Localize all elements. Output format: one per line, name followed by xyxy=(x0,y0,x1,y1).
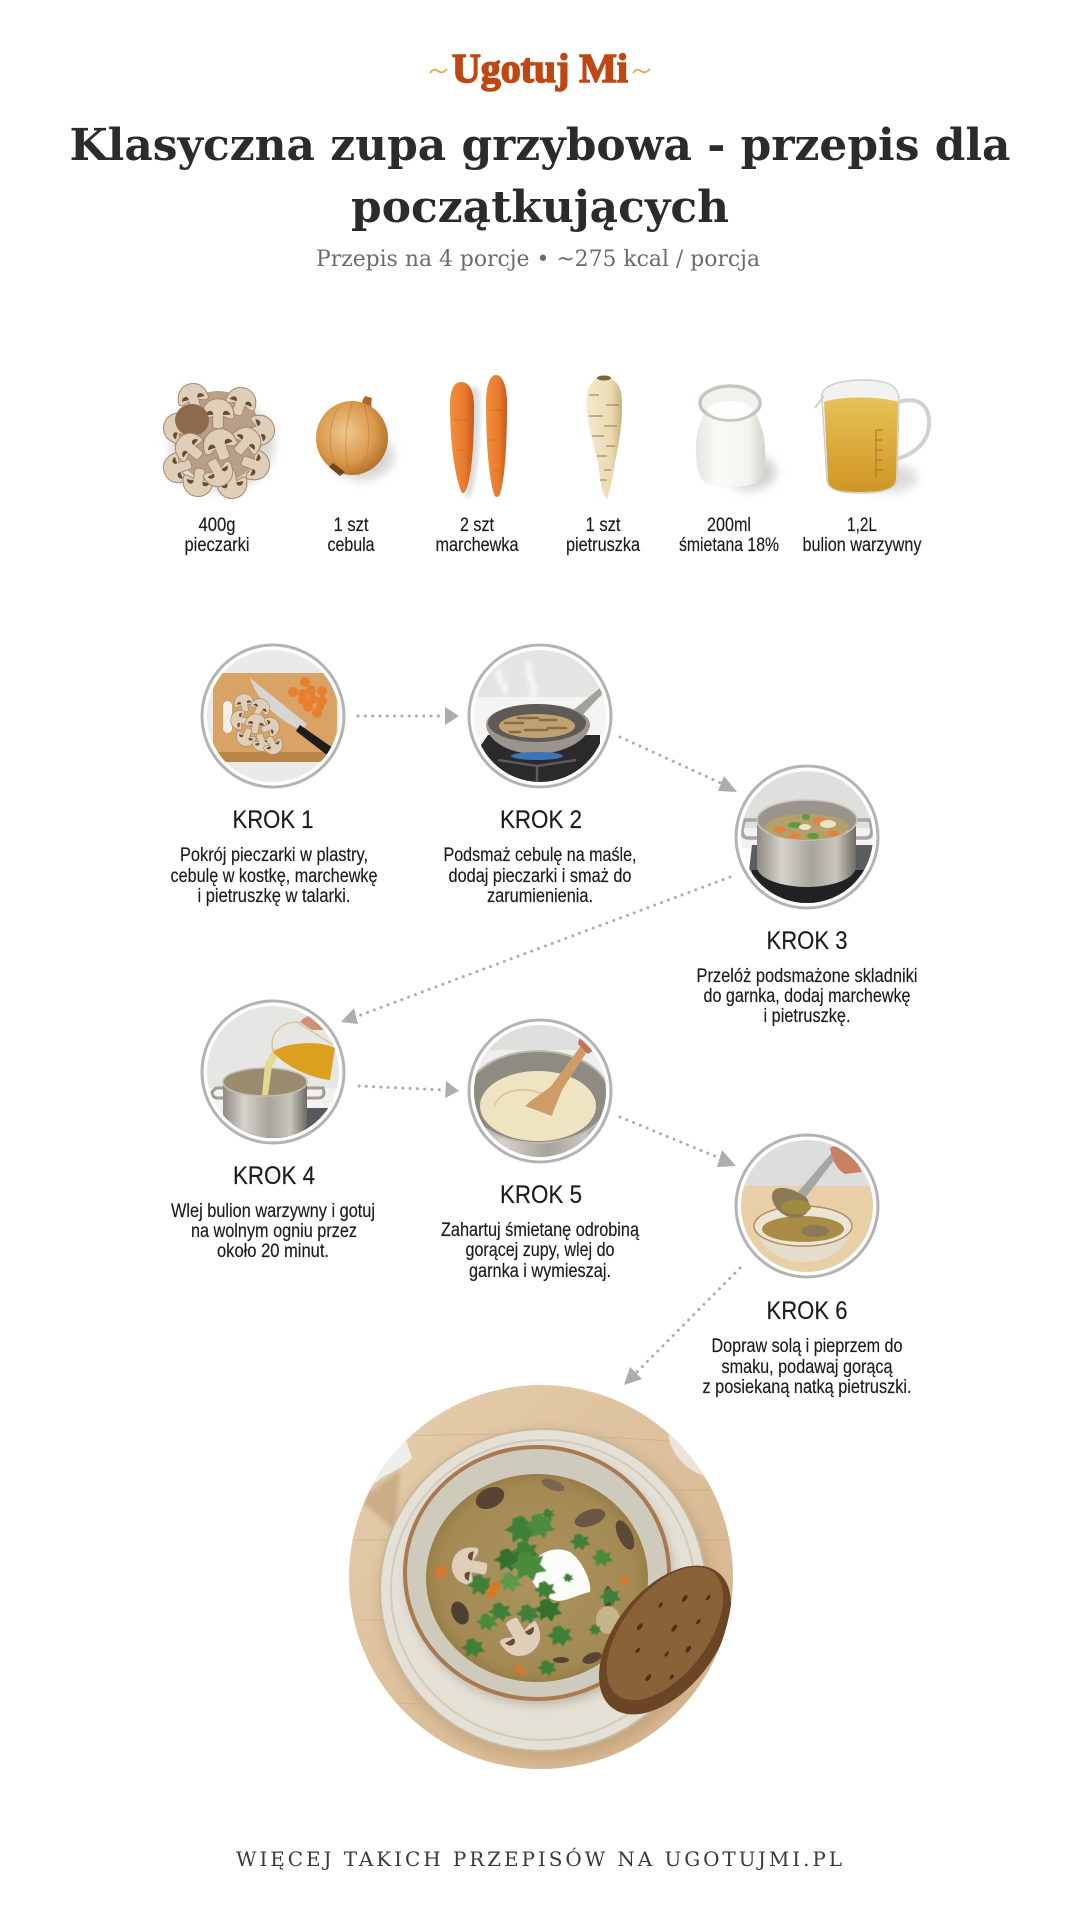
ingredient labels: pieczarki xyxy=(184,535,250,556)
description: step 3: do garnka, dodaj marchewkę xyxy=(704,986,910,1007)
title: Klasyczna zupa grzybowa - przepis dla xyxy=(70,120,1010,171)
arrow: 5 to 6 xyxy=(620,1117,736,1167)
image: frying pan xyxy=(474,650,606,782)
description: step 6: z posiekaną natką pietruszki. xyxy=(702,1377,912,1398)
title xyxy=(70,120,1010,233)
ring xyxy=(469,645,611,787)
title: początkujących xyxy=(351,182,729,233)
subtitle: Przepis na 4 porcje • ~275 kcal / porcja xyxy=(316,247,760,272)
heading: KROK 5: KROK 5 xyxy=(500,1181,582,1209)
panel: step 3 xyxy=(696,766,918,1027)
heading: KROK 3: KROK 3 xyxy=(766,927,848,955)
image: pouring broth xyxy=(207,1006,339,1138)
ingredient labels: bulion warzywny xyxy=(802,535,922,556)
ring xyxy=(202,645,344,787)
description: step 4 xyxy=(171,1201,375,1262)
image: seasoning soup xyxy=(741,1140,873,1272)
parsley xyxy=(461,1509,621,1676)
panel: step 5 xyxy=(441,1020,639,1282)
mushrooms in soup xyxy=(448,1476,638,1666)
arrow: 4 to 5 xyxy=(359,1081,459,1098)
carrot bits xyxy=(433,1563,630,1677)
description: step 6: Dopraw solą i pieprzem do xyxy=(712,1336,902,1357)
description: step 3 xyxy=(696,966,918,1027)
heading: KROK 6: KROK 6 xyxy=(766,1297,848,1325)
description: step 5: garnka i wymieszaj. xyxy=(469,1261,611,1282)
ring xyxy=(736,766,878,908)
description: step 5: gorącej zupy, wlej do xyxy=(466,1240,614,1261)
description: step 2: Podsmaż cebulę na maśle, xyxy=(444,845,636,866)
ingredient labels: 1 szt xyxy=(586,515,621,536)
footer: website call to action: WIĘCEJ TAKICH PRZEPISÓW NA UGOTUJMI.PL xyxy=(236,1846,842,1871)
panel: step 2 xyxy=(444,645,636,907)
description: step 5: Zahartuj śmietanę odrobiną xyxy=(441,1220,639,1241)
ingredient labels: 200ml xyxy=(707,515,751,536)
ring xyxy=(736,1135,878,1277)
ingredient labels: 400g xyxy=(198,515,236,536)
description: step 4: na wolnym ogniu przez xyxy=(191,1221,357,1242)
ingredient labels: 2 szt xyxy=(460,515,495,536)
description: step 2: dodaj pieczarki i smaż do xyxy=(448,866,632,887)
image: finished mushroom soup xyxy=(349,1385,733,1769)
ingredient labels: 1,2L xyxy=(847,515,877,536)
description: step 1: cebulę w kostkę, marchewkę xyxy=(170,866,378,887)
description: step 1: i pietruszkę w talarki. xyxy=(198,886,350,907)
image: cutting board xyxy=(207,650,339,782)
heading: KROK 4: KROK 4 xyxy=(233,1162,315,1190)
heading: KROK 1: KROK 1 xyxy=(232,806,314,834)
description: step 1: Pokrój pieczarki w plastry, xyxy=(180,845,368,866)
ingredient labels: cebula xyxy=(328,535,375,556)
description: step 3: Przelóż podsmażone skladniki xyxy=(696,966,918,987)
description: step 4: około 20 minut. xyxy=(217,1241,329,1262)
panel: step 1 xyxy=(170,645,378,907)
panel: step 4 xyxy=(171,1000,375,1262)
image: pot with vegetables xyxy=(741,771,873,903)
arrow: 3 to 4 xyxy=(341,877,730,1024)
ingredient labels: 1 szt xyxy=(334,515,369,536)
panel: step 6 xyxy=(702,1135,912,1398)
ingredient labels: śmietana 18% xyxy=(679,535,779,556)
description: step 4: Wlej bulion warzywny i gotuj xyxy=(171,1201,375,1222)
ring xyxy=(202,1001,344,1143)
rye bread xyxy=(599,1566,731,1714)
icon: carrots xyxy=(450,375,507,498)
ring xyxy=(469,1020,611,1162)
description: step 2: zarumienienia. xyxy=(487,886,593,907)
description: step 6 xyxy=(702,1336,912,1398)
heading: KROK 2: KROK 2 xyxy=(500,806,582,834)
image: tempering cream xyxy=(474,1025,606,1157)
description: step 6: smaku, podawaj gorącą xyxy=(722,1357,893,1378)
ingredient labels xyxy=(184,515,922,556)
ingredient labels: pietruszka xyxy=(566,535,640,556)
arrow: 2 to 3 xyxy=(620,737,737,792)
icon: cream jar xyxy=(696,386,776,490)
description: step 3: i pietruszkę. xyxy=(764,1006,850,1027)
panel: ingredients xyxy=(159,375,929,556)
description: step 1 xyxy=(170,845,378,907)
logo: Ugotuj Mi: Ugotuj Mi xyxy=(452,45,628,91)
icon: onion xyxy=(316,396,394,480)
description: step 5 xyxy=(441,1220,639,1282)
description: step 2 xyxy=(444,845,636,907)
ingredient labels: marchewka xyxy=(436,535,519,556)
arrow: 1 to 2 xyxy=(358,707,459,725)
cream dollop xyxy=(530,1549,590,1601)
icon: broth jug xyxy=(815,380,929,493)
icon: mushrooms xyxy=(159,380,279,501)
arrow: 6 to final dish xyxy=(624,1268,740,1385)
icon: parsley root xyxy=(586,376,622,499)
